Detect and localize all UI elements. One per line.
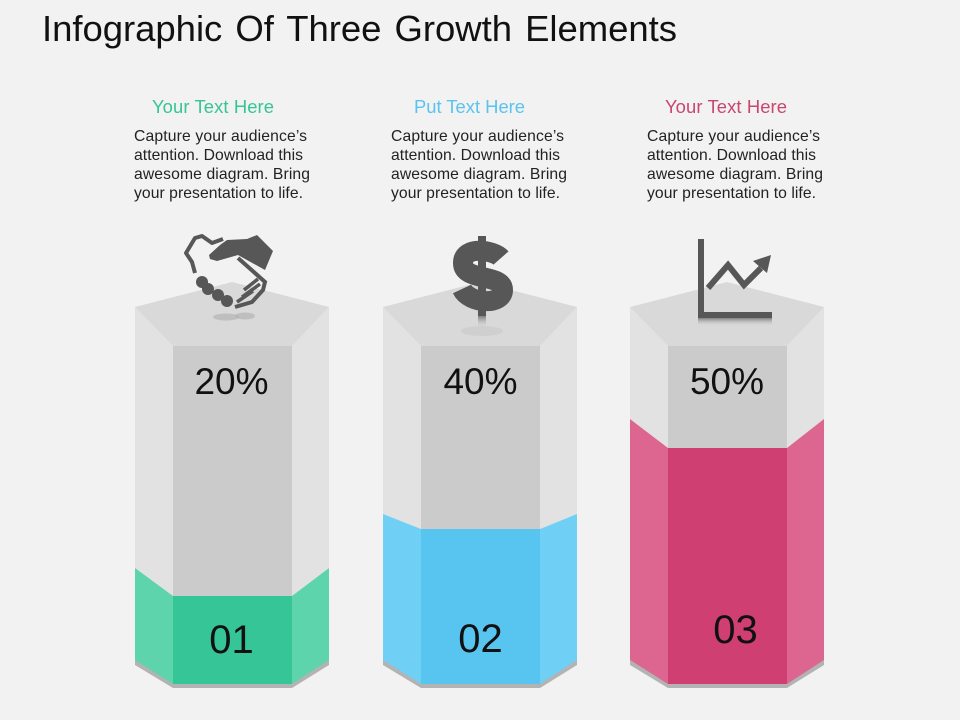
icon: dollar sign [461, 236, 503, 336]
text block: column 2: Capture your audience’s [391, 128, 564, 145]
panel: column 2 text [391, 96, 567, 202]
text block: column 1: awesome diagram. Bring [134, 166, 310, 183]
text block: column 2: awesome diagram. Bring [391, 166, 567, 183]
text block: column 3: awesome diagram. Bring [647, 166, 823, 183]
number: 01: 01 [209, 618, 254, 662]
heading: column 2: Put Text Here [414, 96, 525, 117]
icon: handshake [186, 235, 273, 320]
title: Infographic Of Three Growth Elements [42, 8, 677, 49]
text block: column 1 [134, 128, 310, 202]
value: 20%: 20% [194, 361, 269, 402]
panel: hexagonal bar 2 [383, 282, 577, 688]
icon: line chart with arrow [698, 239, 772, 326]
panel: hexagonal bar 3 [630, 282, 824, 688]
panel: column 3 text [647, 96, 823, 202]
text block: column 1: attention. Download this [134, 147, 303, 164]
number: 02: 02 [458, 617, 503, 661]
text block: column 3: your presentation to life. [647, 185, 816, 202]
text block: column 3: attention. Download this [647, 147, 816, 164]
text block: column 2 [391, 128, 567, 202]
number: 03: 03 [713, 608, 758, 652]
text block: column 3: Capture your audience’s [647, 128, 820, 145]
heading: column 1: Your Text Here [152, 96, 274, 117]
text block: column 1: your presentation to life. [134, 185, 303, 202]
heading: column 3: Your Text Here [665, 96, 787, 117]
panel: hexagonal bar 1 [135, 282, 329, 688]
panel: column 1 text [134, 96, 310, 202]
value: 40%: 40% [443, 361, 518, 402]
text block: column 2: attention. Download this [391, 147, 560, 164]
value: 50%: 50% [690, 361, 764, 402]
text block: column 1: Capture your audience’s [134, 128, 307, 145]
text block: column 2: your presentation to life. [391, 185, 560, 202]
text block: column 3 [647, 128, 823, 202]
